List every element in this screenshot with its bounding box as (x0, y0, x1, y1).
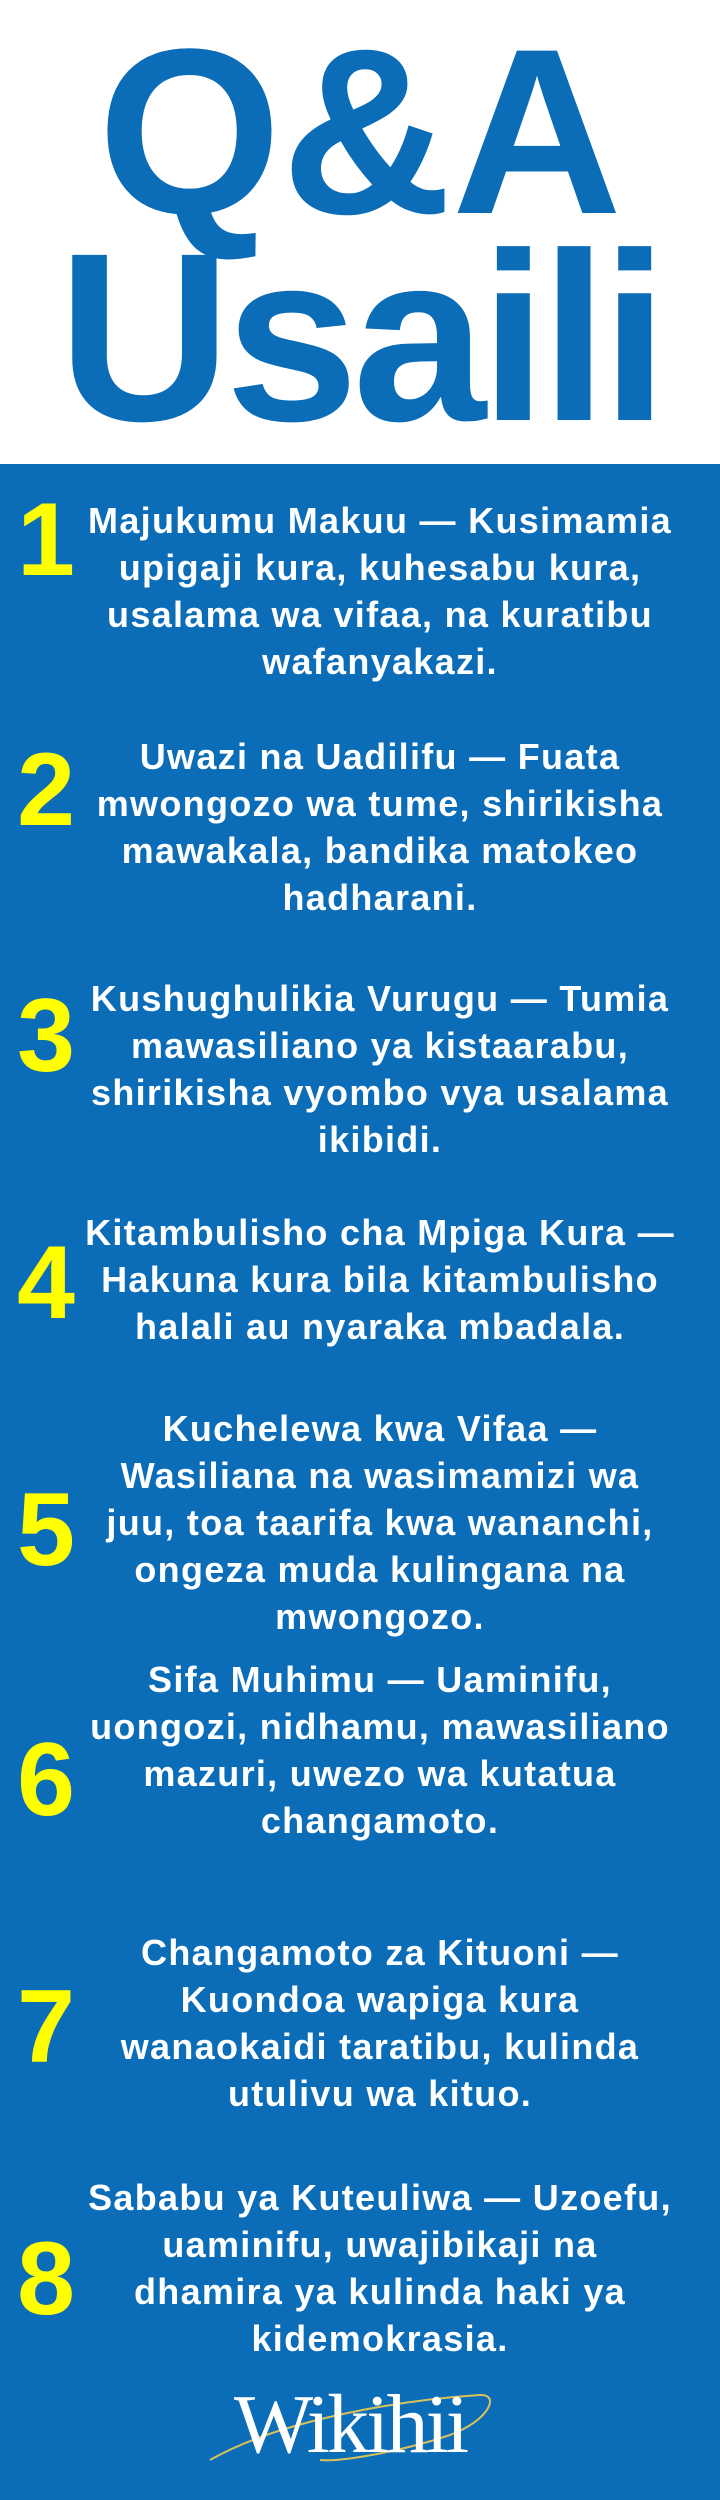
item 1 text: upigaji kura, kuhesabu kura, (119, 547, 641, 588)
item 4 text (85, 1212, 675, 1347)
number 5: 5 (17, 1472, 75, 1588)
number 2: 2 (17, 732, 75, 848)
title: Usaili: Usaili (58, 203, 662, 471)
item 1 text: wafanyakazi. (262, 641, 498, 682)
item 6 text: mazuri, uwezo wa kutatua (143, 1753, 617, 1794)
number 8: 8 (17, 2221, 75, 2337)
logo: Wikihii: Wikihii (234, 2378, 466, 2471)
item 4 text: Hakuna kura bila kitambulisho (101, 1259, 659, 1300)
item 6 text: uongozi, nidhamu, mawasiliano (90, 1706, 670, 1747)
item 5 text: mwongozo. (275, 1596, 485, 1637)
item 2 text: mwongozo wa tume, shirikisha (97, 783, 663, 824)
item 3 text (91, 978, 669, 1160)
number 7: 7 (17, 1969, 75, 2085)
number 1: 1 (17, 482, 75, 598)
item 5 text: juu, toa taarifa kwa wananchi, (106, 1502, 654, 1543)
item 8 text: Sababu ya Kuteuliwa — Uzoefu, (88, 2177, 672, 2218)
item 7 text: wanaokaidi taratibu, kulinda (121, 2026, 639, 2067)
number 6: 6 (17, 1722, 75, 1838)
item 2 text: hadharani. (282, 877, 478, 918)
item 4 text: Kitambulisho cha Mpiga Kura — (85, 1212, 675, 1253)
item 1 text (88, 500, 672, 682)
item 7 text: Kuondoa wapiga kura (181, 1979, 579, 2020)
item 5 text (106, 1408, 654, 1637)
item 2 text: Uwazi na Uadilifu — Fuata (140, 736, 620, 777)
item 5 text: Kuchelewa kwa Vifaa — (163, 1408, 597, 1449)
item 2 text: mawakala, bandika matokeo (122, 830, 638, 871)
item 6 text (90, 1659, 670, 1841)
item 7 text (120, 1932, 639, 2114)
item 3 text: mawasiliano ya kistaarabu, (131, 1025, 629, 1066)
item 6 text: Sifa Muhimu — Uaminifu, (148, 1659, 612, 1700)
item 8 text: dhamira ya kulinda haki ya (134, 2271, 626, 2312)
item 5 text: Wasiliana na wasimamizi wa (121, 1455, 639, 1496)
item 8 text: kidemokrasia. (251, 2318, 509, 2359)
item 6 text: changamoto. (261, 1800, 499, 1841)
item 7 text: Changamoto za Kituoni — (141, 1932, 619, 1973)
item 3 text: shirikisha vyombo vya usalama (91, 1072, 669, 1113)
item 5 text: ongeza muda kulingana na (134, 1549, 626, 1590)
number 3: 3 (17, 978, 75, 1094)
title: Q&A: Q&A (98, 0, 622, 264)
item 3 text: ikibidi. (318, 1119, 442, 1160)
item 8 text (88, 2177, 672, 2359)
item 4 text: halali au nyaraka mbadala. (135, 1306, 625, 1347)
item 1 text: usalama wa vifaa, na kuratibu (107, 594, 653, 635)
header panel (0, 0, 720, 464)
item 8 text: uaminifu, uwajibikaji na (162, 2224, 598, 2265)
item 3 text: Kushughulikia Vurugu — Tumia (91, 978, 669, 1019)
item 1 text: Majukumu Makuu — Kusimamia (88, 500, 672, 541)
number 4: 4 (17, 1225, 75, 1341)
item 2 text (97, 736, 663, 918)
item 7 text: utulivu wa kituo. (228, 2073, 532, 2114)
